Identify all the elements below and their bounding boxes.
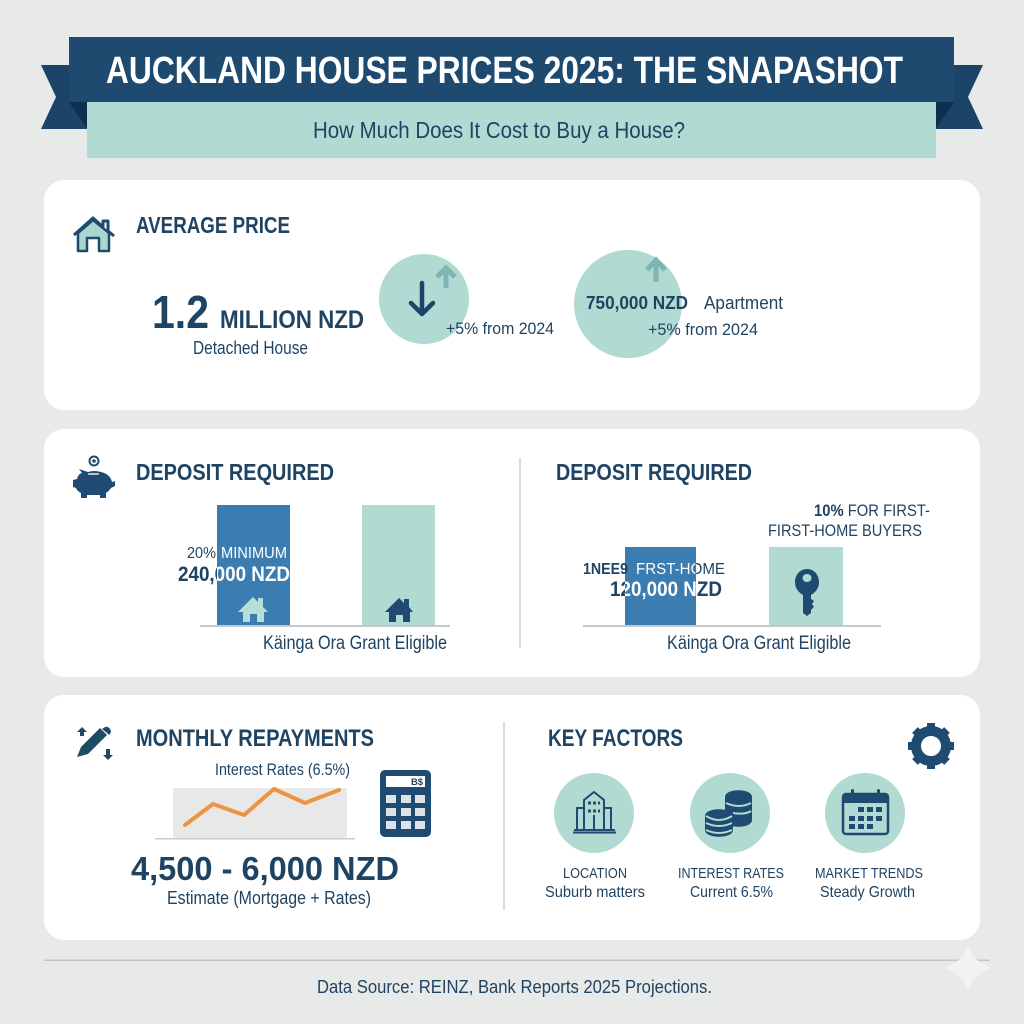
factor: market trends: MARKET TRENDS	[815, 865, 923, 882]
subtitle: How Much Does It Cost to Buy a House?	[313, 117, 685, 143]
circle: house change: +5% from 2024	[446, 319, 554, 338]
factor: market trends: Steady Growth	[820, 884, 915, 901]
factor: location: LOCATION	[563, 865, 627, 882]
factor: interest rates: Current 6.5%	[690, 884, 773, 901]
icon: sparkle	[944, 944, 992, 992]
heading: deposit required right: DEPOSIT REQUIRED	[556, 459, 752, 485]
detached house price	[152, 286, 364, 358]
circle: apartment price	[574, 250, 783, 358]
icon: calculator	[380, 770, 431, 837]
factor: market trends	[815, 773, 923, 901]
icon: calendar	[843, 789, 888, 834]
heading: average price: AVERAGE PRICE	[136, 212, 290, 238]
bar chart: twenty percent deposit: 20%	[187, 545, 216, 562]
icon: coins	[705, 790, 752, 837]
heading: monthly repayments: MONTHLY REPAYMENTS	[136, 725, 374, 752]
heading: key factors: KEY FACTORS	[548, 725, 683, 752]
bar chart: ten percent deposit: 10% FOR FIRST-	[814, 501, 930, 520]
repayment estimate	[131, 850, 399, 908]
factor: location: Suburb matters	[545, 884, 645, 901]
icon: house outline	[74, 218, 114, 251]
factor: interest rates	[678, 773, 784, 901]
circle: apartment price: 750,000 NZD	[586, 293, 688, 313]
icon: gear	[908, 723, 954, 769]
line chart: interest rates	[155, 760, 355, 840]
icon: piggy bank	[73, 456, 115, 498]
icon: calculator: B$	[411, 777, 423, 787]
panel: average price	[44, 180, 980, 410]
factor: interest rates: INTEREST RATES	[678, 865, 784, 882]
circle: apartment price: Apartment	[704, 293, 783, 313]
circle: apartment price: +5% from 2024	[648, 320, 758, 339]
repayment estimate: 4,500 - 6,000 NZD	[131, 850, 399, 887]
detached house price: MILLION NZD	[220, 306, 364, 334]
bar chart: ten percent deposit: FRST-HOME	[636, 561, 725, 578]
header banner	[41, 37, 983, 158]
heading: deposit required left: DEPOSIT REQUIRED	[136, 459, 334, 485]
bar chart: ten percent deposit	[583, 501, 930, 654]
bar chart: twenty percent deposit	[178, 505, 450, 654]
bar chart: ten percent deposit: Käinga Ora Grant Eligible	[667, 633, 851, 654]
panel: monthly repayments and key factors	[44, 695, 980, 940]
detached house price: 1.2	[152, 286, 209, 338]
icon: key	[795, 569, 819, 616]
bar chart: ten percent deposit: 1NEE9	[583, 561, 628, 578]
panel: deposit required	[44, 429, 980, 677]
icon: building	[573, 792, 616, 832]
repayment estimate: Estimate (Mortgage + Rates)	[167, 888, 371, 908]
circle: house change	[379, 254, 554, 344]
factor: location	[545, 773, 645, 901]
bar chart: twenty percent deposit: Käinga Ora Grant Eligible	[263, 633, 447, 654]
bar chart: twenty percent deposit: 240,000 NZD	[178, 563, 290, 586]
bar chart: twenty percent deposit: MINIMUM	[221, 545, 287, 562]
bar chart: ten percent deposit: FIRST-HOME BUYERS	[768, 521, 922, 540]
icon: pencil with arrows	[77, 727, 113, 760]
line chart: interest rates: Interest Rates (6.5%)	[215, 760, 350, 779]
footer source: Data Source: REINZ, Bank Reports 2025 Projections.	[317, 977, 712, 997]
detached house price: Detached House	[193, 338, 308, 358]
bar chart: ten percent deposit: 120,000 NZD	[610, 578, 722, 601]
